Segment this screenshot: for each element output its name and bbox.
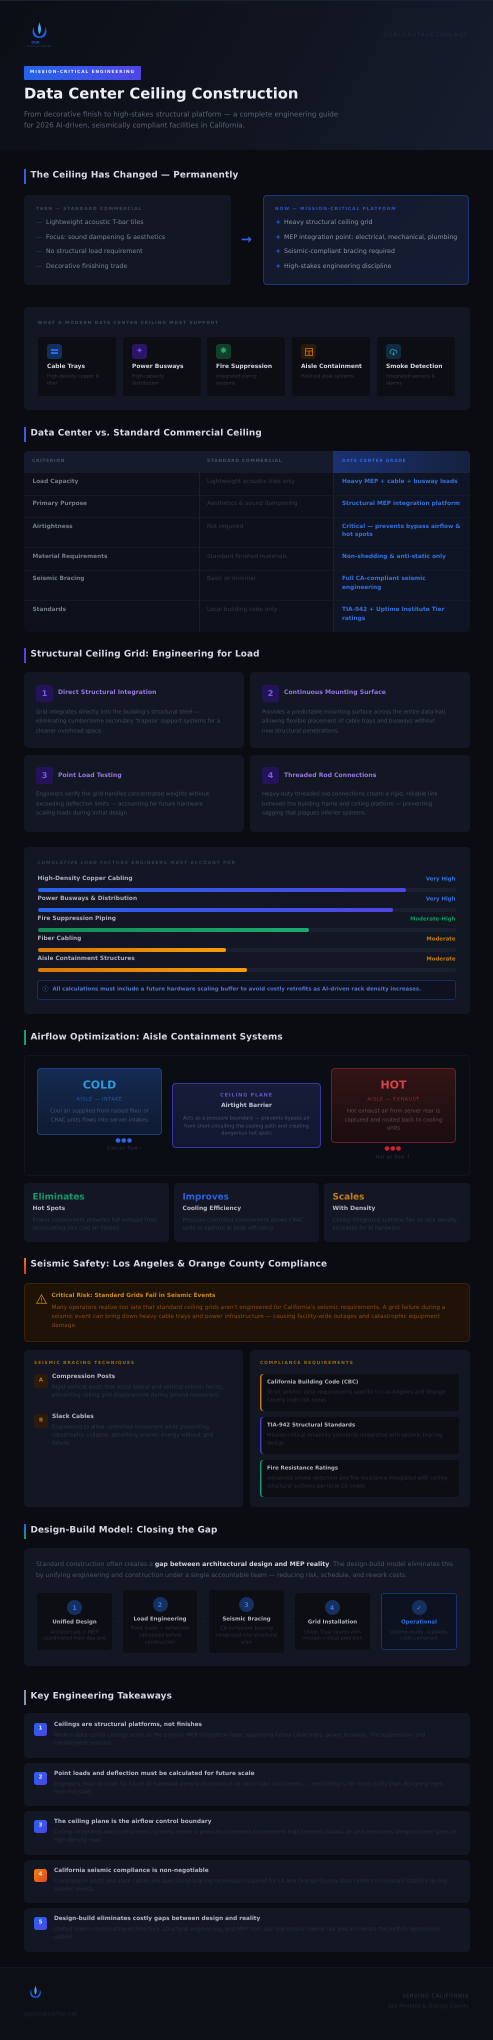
card: continuous mounting surface: Provides a predictable mounting surface across the entire data hall, xyxy=(262,709,447,715)
hot aisle xyxy=(331,1068,456,1143)
heading: structural grid: Structural Ceiling Grid: Engineering for Load xyxy=(30,650,260,660)
requirement: TIA-942: TIA-942 Structural Standards xyxy=(267,1422,355,1428)
bar: copper cabling: Very High xyxy=(426,876,456,882)
card: eliminates: Hot Spots xyxy=(32,1206,65,1212)
comparison table: engineering xyxy=(342,585,381,591)
takeaway 3: high-density rows. xyxy=(54,1837,103,1843)
step: operational: Uptime-ready, scalable, xyxy=(390,1629,448,1635)
technique A: preventing ceiling grid displacement during ground movement. xyxy=(52,1392,220,1398)
technique A: Rigid vertical posts that resist lateral and vertical seismic forces, xyxy=(52,1384,224,1390)
card: eliminates: Proper containment prevents hot exhaust from xyxy=(32,1217,157,1223)
card: smoke detection xyxy=(377,337,455,396)
card: power busways: High-capacity xyxy=(132,374,164,379)
bar: power busways: Power Busways & Distribution xyxy=(38,896,137,902)
panel: cumulative load factors: CUMULATIVE LOAD FACTORS ENGINEERS MUST ACCOUNT FOR xyxy=(38,861,236,866)
comparison table: Full CA-compliant seismic xyxy=(342,576,426,582)
footer region: Los Angeles & Orange County xyxy=(388,2003,469,2009)
title: Data Center Ceiling Construction xyxy=(24,86,298,103)
technique B: Engineered to allow controlled movement while preventing xyxy=(52,1424,209,1430)
comparison table xyxy=(24,451,470,632)
takeaway 2: Point loads and deflection must be calculated for future scale xyxy=(54,1771,254,1777)
card: direct structural integration: eliminating cumbersome secondary 'trapeze' support systems for a xyxy=(36,718,220,724)
ceiling plane: Acts as a pressure boundary — prevents bypass air xyxy=(183,1116,310,1122)
card: improves: Pressure-controlled environment allows CRAC xyxy=(182,1217,303,1223)
technique B: B xyxy=(39,1417,43,1423)
card: smoke detection: Smoke Detection xyxy=(386,364,442,370)
bar: aisle containment xyxy=(38,956,456,972)
panel: then: THEN — STANDARD COMMERCIAL xyxy=(36,206,142,211)
card: continuous mounting surface: allowing flexible placement of cable trays and busways without xyxy=(262,718,435,724)
card: direct structural integration xyxy=(24,672,244,748)
panel: now: NOW — MISSION-CRITICAL PLATFORM xyxy=(275,206,397,211)
takeaway 2 xyxy=(24,1762,470,1806)
bar: aisle containment: Moderate xyxy=(426,956,456,962)
arrow: → xyxy=(241,232,252,247)
footer region xyxy=(388,1993,469,2009)
takeaway 5: Unified teams coordinating architecture, structural engineering, and MEP from day one reduce rework risk and accelerate the path to operational xyxy=(54,1927,440,1933)
requirement: fire resistance xyxy=(260,1460,458,1497)
comparison table: Airtightness xyxy=(32,524,73,530)
comparison table: Local building code only xyxy=(207,607,277,613)
panel: cumulative load factors xyxy=(24,847,470,1014)
heading: seismic: Seismic Safety: Los Angeles & Orange County Compliance xyxy=(30,1260,327,1270)
takeaway 3: The ceiling plane is the airflow control boundary xyxy=(54,1819,211,1825)
bar: fire suppression: Moderate-High xyxy=(410,916,456,922)
card: scales: Ceiling-integrated systems flex as rack density xyxy=(332,1217,457,1223)
panel: then: Decorative finishing trade xyxy=(46,263,127,270)
panel: then: — xyxy=(36,219,42,226)
step 2 xyxy=(123,1590,197,1653)
card: direct structural integration: Grid integrates directly into the building's structural steel — xyxy=(36,709,200,715)
step 2: calculated before xyxy=(139,1633,181,1639)
takeaway 4 xyxy=(24,1860,470,1903)
panel: design-build xyxy=(24,1548,470,1666)
takeaway 4: seismic events. xyxy=(54,1886,95,1892)
takeaway 5 xyxy=(24,1908,470,1952)
ceiling plane: CEILING PLANE xyxy=(220,1092,273,1098)
card: smoke detection: alarms xyxy=(386,382,402,387)
card: cable trays xyxy=(38,337,116,396)
panel: now: + xyxy=(276,219,281,226)
card: continuous mounting surface: 2 xyxy=(268,688,273,698)
step: operational: Operational xyxy=(401,1619,437,1625)
hot aisle: captured and routed back to cooling xyxy=(344,1117,443,1123)
takeaway 5: Design-build eliminates costly gaps between design and reality xyxy=(54,1916,260,1922)
connector: › xyxy=(375,1618,377,1625)
subtitle: From decorative finish to high-stakes structural platform — a complete engineering guide xyxy=(24,110,338,118)
logo: CONSTRUCTION INC xyxy=(27,44,51,47)
card: point load testing: scaling loads during initial design. xyxy=(36,810,129,816)
panel: then: Lightweight acoustic T-bar tiles xyxy=(46,219,143,226)
comparison table: Heavy MEP + cable + busway loads xyxy=(342,479,458,485)
ceiling plane xyxy=(172,1083,321,1148)
step 2: 2 xyxy=(158,1600,162,1608)
panel: compliance requirements xyxy=(250,1350,470,1507)
requirement: CBC: County high-risk zones xyxy=(267,1397,326,1403)
card: fire suppression: Fire Suppression xyxy=(216,364,272,370)
comparison table: Not required xyxy=(207,524,243,530)
card: scales xyxy=(324,1183,470,1242)
bar: power busways: Very High xyxy=(426,896,456,902)
callout: scaling buffer: All calculations must include a future hardware scaling buffer to avoid costly retrofits as AI-driven rack density increases. xyxy=(52,986,421,992)
cold aisle: COLD xyxy=(83,1078,116,1092)
panel: now: + xyxy=(276,263,281,270)
bar: fire suppression xyxy=(38,916,456,932)
step 3 xyxy=(209,1590,284,1653)
connector: › xyxy=(203,1618,205,1625)
header xyxy=(0,0,493,150)
panel: aisle diagram xyxy=(24,1055,470,1176)
card: point load testing: exceeding deflection limits — accounting for future hardware xyxy=(36,801,203,807)
technique A: Compression Posts xyxy=(52,1374,115,1380)
panel: then: No structural load requirement xyxy=(46,248,143,255)
technique B: catastrophic collapse, absorbing seismic energy without grid xyxy=(52,1432,213,1438)
card: scales: With Density xyxy=(332,1206,375,1212)
hot flow: ●●● xyxy=(384,1145,402,1152)
panel: then: — xyxy=(36,248,42,255)
card: threaded rod connections: Threaded Rod Connections xyxy=(284,771,376,778)
heading: design-build: Design-Build Model: Closing the Gap xyxy=(30,1525,217,1535)
takeaway 1: Ceilings are structural platforms, not finishes xyxy=(54,1722,202,1728)
intro text: Standard construction often creates a gap between architectural design and MEP reality. The design-build model eliminates this xyxy=(36,1561,453,1568)
requirement: fire resistance: Advanced smoke detection and fire resistance integrated with ceiling xyxy=(267,1475,447,1481)
ceiling plane: Airtight Barrier xyxy=(221,1103,272,1109)
cold flow: ●●● xyxy=(115,1136,133,1144)
panel: ceiling must support: WHAT A MODERN DATA CENTER CEILING MUST SUPPORT xyxy=(38,321,219,326)
step 3: plan xyxy=(241,1640,252,1646)
card: threaded rod connections: sagging that plagues inferior systems. xyxy=(262,810,367,816)
card: cable trays: Cable Trays xyxy=(47,364,85,370)
panel: seismic bracing xyxy=(24,1350,243,1507)
card: point load testing: Point Load Testing xyxy=(58,771,122,778)
takeaway 2: from the start. xyxy=(54,1789,92,1795)
heading: comparison: Data Center vs. Standard Commercial Ceiling xyxy=(30,428,262,438)
bar: copper cabling: High-Density Copper Cabling xyxy=(38,876,133,882)
comparison table: hot spots xyxy=(342,532,373,538)
technique A xyxy=(34,1374,224,1398)
takeaway 1: containment systems. xyxy=(54,1740,113,1746)
connector: › xyxy=(289,1618,291,1625)
comparison table: Load Capacity xyxy=(32,479,78,485)
heading: airflow: Airflow Optimization: Aisle Containment Systems xyxy=(30,1032,283,1042)
bar: fiber cabling xyxy=(38,936,456,952)
requirement: fire resistance: structural systems per local CA codes xyxy=(267,1483,365,1489)
panel: now: Heavy structural ceiling grid xyxy=(284,219,373,226)
step 4: mission-critical precision xyxy=(302,1636,363,1642)
takeaway 3: 3 xyxy=(39,1822,42,1828)
card: aisle containment xyxy=(292,337,370,396)
card: continuous mounting surface: new structural penetrations. xyxy=(262,728,339,734)
comparison table: Standard finished materials xyxy=(207,554,287,560)
icon: warning xyxy=(36,1294,47,1304)
logo xyxy=(26,22,52,47)
callout: critical risk xyxy=(24,1283,470,1342)
requirement: fire resistance: Fire Resistance Ratings xyxy=(267,1465,338,1471)
card: power busways xyxy=(123,337,201,396)
takeaway 2: 2 xyxy=(39,1774,42,1780)
hot aisle: HOT xyxy=(380,1078,407,1092)
card: power busways: Power Busways xyxy=(132,364,184,370)
step 3: 3 xyxy=(244,1600,249,1608)
technique B: Slack Cables xyxy=(52,1414,94,1420)
bar: fire suppression: Fire Suppression Piping xyxy=(38,916,116,922)
step 2: Point loads + deflection xyxy=(131,1625,189,1631)
cold aisle: CRAC units flows into server intakes xyxy=(51,1117,148,1123)
takeaway 4: Compression posts and slack cables are specialized bracing techniques required for LA and Orange County data centers to maintain stability during xyxy=(54,1878,447,1884)
card: direct structural integration: cleaner overhead space. xyxy=(36,728,103,734)
step 3: integrated into structural xyxy=(216,1633,277,1639)
card: fire suppression xyxy=(207,337,285,396)
card: fire suppression: systems xyxy=(216,382,235,387)
takeaway 1 xyxy=(24,1713,470,1758)
panel: now: High-stakes engineering discipline xyxy=(284,263,391,270)
panel: seismic bracing: SEISMIC BRACING TECHNIQUES xyxy=(34,1360,135,1365)
heading: takeaways: Key Engineering Takeaways xyxy=(30,1691,172,1701)
comparison table: Structural MEP integration platform xyxy=(342,501,460,507)
step: operational: ✓ xyxy=(416,1603,422,1611)
subtitle: for 2026 AI-driven, seismically compliant facilities in California. xyxy=(24,121,245,129)
step 3: CA-compliant bracing xyxy=(220,1625,273,1631)
card: cable trays: fiber xyxy=(47,382,58,387)
technique B xyxy=(34,1414,213,1446)
takeaway 1: Modern data center ceilings serve as the primary MEP integration layer supporting heavy cable trays, power busways, fire suppression, and xyxy=(54,1733,425,1739)
requirement: TIA-942 xyxy=(260,1417,458,1454)
step: operational: code-compliant xyxy=(400,1636,438,1642)
callout: scaling buffer: ⓘ xyxy=(42,986,49,993)
card: eliminates xyxy=(24,1183,169,1242)
comparison table: CRITERION xyxy=(32,459,65,464)
hot aisle: Hot exhaust air from server rear is xyxy=(347,1108,440,1114)
comparison table: Material Requirements xyxy=(32,554,107,560)
comparison table: STANDARD COMMERCIAL xyxy=(207,459,282,464)
card: aisle containment: Aisle Containment xyxy=(301,364,362,370)
card: eliminates: recirculating into cold air intakes xyxy=(32,1225,119,1231)
panel: ceiling must support xyxy=(24,307,470,410)
card: improves: Improves xyxy=(182,1192,229,1202)
step: operational xyxy=(381,1593,457,1650)
callout: critical risk: Critical Risk: Standard Grids Fail in Seismic Events xyxy=(52,1293,215,1299)
panel: then: Focus: sound dampening & aesthetics xyxy=(46,233,165,240)
card: scales: Scales xyxy=(332,1192,364,1202)
card: continuous mounting surface xyxy=(250,672,470,748)
step 3: Seismic Bracing xyxy=(222,1616,271,1622)
comparison table: ratings xyxy=(342,616,365,622)
card: improves: units to operate at peak efficiency xyxy=(182,1225,274,1231)
card: threaded rod connections: 4 xyxy=(268,770,273,780)
requirement: CBC: California Building Code (CBC) xyxy=(267,1379,358,1385)
hot aisle: units xyxy=(387,1125,400,1131)
hot flow: Hot air flow ↑ xyxy=(376,1154,410,1160)
technique B: failure. xyxy=(52,1440,70,1446)
step 2: construction xyxy=(145,1640,175,1646)
subtitle xyxy=(24,110,338,129)
card: eliminates: Eliminates xyxy=(32,1192,85,1202)
requirement: CBC xyxy=(260,1374,458,1411)
step 1: Unified Design xyxy=(52,1619,97,1625)
takeaway 4: 4 xyxy=(39,1871,42,1877)
comparison table: Non-shedding & anti-static only xyxy=(342,554,446,560)
takeaway 3: Ceiling-integrated aisle containment systems create a pressure-controlled environment that prevents bypass air and eliminates dangerous hot spots in xyxy=(54,1830,456,1836)
panel: now: Seismic-compliant bracing required xyxy=(284,248,395,255)
bar: fiber cabling: Fiber Cabling xyxy=(38,936,81,942)
step 4: Grid Installation xyxy=(308,1619,357,1625)
comparison table: Basic or minimal xyxy=(207,576,255,582)
card: threaded rod connections: between the building frame and ceiling platform — preventing xyxy=(262,801,432,807)
panel: then: — xyxy=(36,263,42,270)
callout: scaling buffer xyxy=(37,980,456,1000)
takeaway 2: Engineers must account for future AI hardware density increases in all initial load calculations — retrofitting is far more costly than designing right xyxy=(54,1781,443,1787)
requirement: TIA-942: Mission-critical reliability standards integrated with seismic bracing xyxy=(267,1432,442,1438)
takeaway 5: 5 xyxy=(39,1919,42,1925)
step 4: Union T-bar teams with xyxy=(304,1629,361,1635)
footer xyxy=(0,1967,493,2040)
comparison table: Lightweight acoustic tiles only xyxy=(207,479,295,485)
step 2: Load Engineering xyxy=(133,1616,187,1622)
takeaway 3 xyxy=(24,1811,470,1855)
callout: critical risk: Many operators realize too late that standard ceiling grids aren't engineered for California's seismic requirements. A grid failure during a xyxy=(52,1305,445,1311)
cold flow: Cool air flow › xyxy=(107,1146,141,1152)
cold aisle: AISLE — INTAKE xyxy=(76,1096,123,1102)
card: point load testing xyxy=(24,755,244,832)
bar: aisle containment: Aisle Containment Structures xyxy=(38,956,135,962)
hot flow xyxy=(376,1145,410,1160)
logo: DGR xyxy=(31,40,40,44)
step 4: 4 xyxy=(330,1603,334,1611)
card: aisle containment: Hot/cold aisle systems xyxy=(301,374,354,379)
takeaway 4: California seismic compliance is non-negotiable xyxy=(54,1868,209,1874)
card: smoke detection: Integrated sensors & xyxy=(386,374,435,379)
footer logo xyxy=(30,1986,41,1998)
card: power busways: distribution xyxy=(132,382,159,387)
comparison table: TIA-942 + Uptime Institute Tier xyxy=(342,607,444,613)
card: continuous mounting surface: Continuous Mounting Surface xyxy=(284,688,386,695)
requirement: CBC: Strict seismic zone requirements specific to Los Angeles and Orange xyxy=(267,1389,445,1395)
bar: copper cabling xyxy=(38,876,456,892)
step 1: coordinated from day one xyxy=(43,1636,106,1642)
card: power busways: ✦ xyxy=(136,346,143,356)
comparison table: DATA CENTER GRADE xyxy=(342,459,406,464)
card: fire suppression: Integrated piping xyxy=(216,374,257,379)
panel: compliance requirements: COMPLIANCE REQUIREMENTS xyxy=(260,1360,354,1365)
panel: now: + xyxy=(276,248,281,255)
footer region: SERVING CALIFORNIA xyxy=(402,1993,469,1999)
intro text: by unifying engineering and construction under a single accountable team — reducing risk, schedule, and rework costs. xyxy=(36,1571,407,1578)
comparison table: Standards xyxy=(32,607,66,613)
requirement: TIA-942: design xyxy=(267,1440,284,1446)
hot aisle: AISLE — EXHAUST xyxy=(367,1096,420,1102)
panel: now xyxy=(263,195,469,284)
technique A: A xyxy=(39,1377,43,1383)
takeaway 1: 1 xyxy=(39,1725,42,1731)
panel: then: — xyxy=(36,233,42,240)
comparison table: Critical — prevents bypass airflow & xyxy=(342,524,460,530)
intro text xyxy=(36,1561,453,1578)
card: point load testing: 3 xyxy=(42,770,47,780)
callout: critical risk: seismic event can bring down heavy cable trays and power infrastructure — causing facility-wide outages and catastrophic equipment xyxy=(52,1314,440,1320)
panel: then xyxy=(24,195,230,285)
bar: power busways xyxy=(38,896,456,912)
step 1 xyxy=(37,1593,112,1650)
card: threaded rod connections xyxy=(250,755,470,832)
comparison table: Aesthetics & sound dampening xyxy=(207,501,297,507)
panel: now: + xyxy=(276,233,281,240)
ceiling plane: dangerous hot spots xyxy=(221,1131,272,1137)
cold flow xyxy=(107,1136,141,1152)
panel: now: MEP integration point: electrical, mechanical, plumbing xyxy=(284,233,457,240)
cold aisle xyxy=(37,1068,162,1134)
badge xyxy=(24,66,141,80)
connector: › xyxy=(117,1618,119,1625)
badge: MISSION-CRITICAL ENGINEERING xyxy=(30,70,135,75)
step 1: Architecture + MEP xyxy=(51,1629,98,1635)
footer domain: dgrconstruction.net xyxy=(24,2011,77,2017)
card: improves xyxy=(174,1183,319,1242)
card: fire suppression: ✸ xyxy=(220,346,227,356)
takeaway 5: uptime. xyxy=(54,1934,74,1940)
cold aisle: Cool air supplied from raised floor or xyxy=(50,1108,149,1114)
card: scales: increases for AI hardware xyxy=(332,1225,400,1231)
card: direct structural integration: 1 xyxy=(42,688,47,698)
domain: DGRCONSTRUCTION.NET xyxy=(383,32,468,38)
bar: fiber cabling: Moderate xyxy=(426,936,456,942)
comparison table: Seismic Bracing xyxy=(32,576,84,582)
card: point load testing: Engineers verify the grid handles concentrated weights without xyxy=(36,791,209,797)
heading: ceiling changed: The Ceiling Has Changed — Permanently xyxy=(30,171,238,181)
comparison table: Primary Purpose xyxy=(32,501,87,507)
step 4 xyxy=(295,1593,370,1650)
card: cable trays: High-density copper & xyxy=(47,374,100,379)
ceiling plane: from short-circuiting the cooling path and creating xyxy=(184,1123,309,1129)
step 1: 1 xyxy=(72,1603,77,1611)
card: improves: Cooling Efficiency xyxy=(182,1206,241,1212)
card: direct structural integration: Direct Structural Integration xyxy=(58,688,156,695)
card: threaded rod connections: Heavy-duty threaded rod connections create a rigid, reliable link xyxy=(262,791,438,797)
callout: critical risk: damage. xyxy=(52,1323,77,1329)
